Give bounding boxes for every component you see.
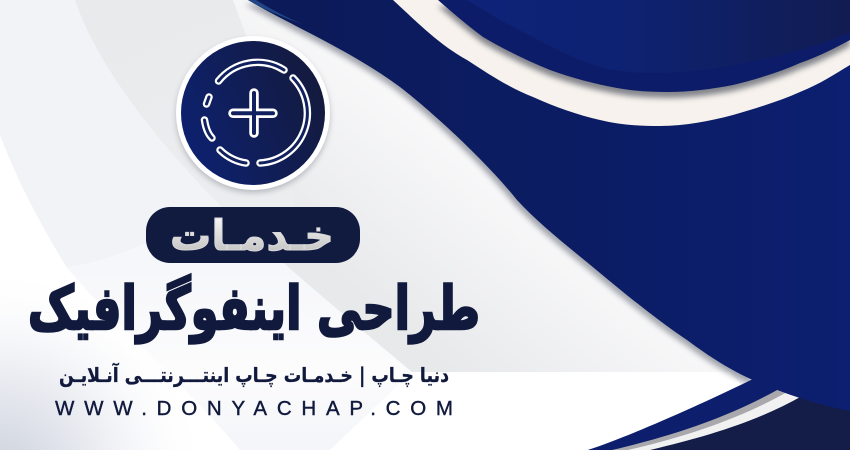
- background: white lower sweep: [0, 135, 800, 450]
- chip: services: خـدمـات: [170, 211, 334, 260]
- background: darker grey top band: [75, 0, 300, 240]
- bottom white stripe: [628, 392, 802, 450]
- blue highlight on wave tip: [248, 0, 302, 24]
- bottom stripe shadow: [612, 389, 790, 450]
- chip: services: [146, 207, 360, 263]
- main navy wave: [248, 0, 850, 411]
- top bright navy wave: [467, 0, 850, 73]
- background: grey middle sweep: [222, 0, 730, 372]
- title: طراحی اینفوگرافیک: [28, 274, 480, 344]
- cream band: [393, 0, 850, 126]
- bottom navy stripe: [588, 378, 777, 450]
- top navy wave: [438, 0, 850, 92]
- top band shadow: [438, 6, 850, 98]
- icon: outlined plus in broken ring: [204, 62, 307, 163]
- bottom right dark corner: [588, 378, 850, 450]
- background: pale tint wedge: [67, 207, 412, 450]
- icon badge: [176, 36, 330, 193]
- shadow of main wave: [245, 4, 752, 385]
- background: lower-left corner shade: [0, 240, 240, 450]
- website url: WWW.DONYACHAP.COM: [55, 397, 453, 420]
- subtitle: دنیا چـاپ | خـدمـات چـاپ اینتـــرنتـــی آنـلایـن: [59, 362, 449, 388]
